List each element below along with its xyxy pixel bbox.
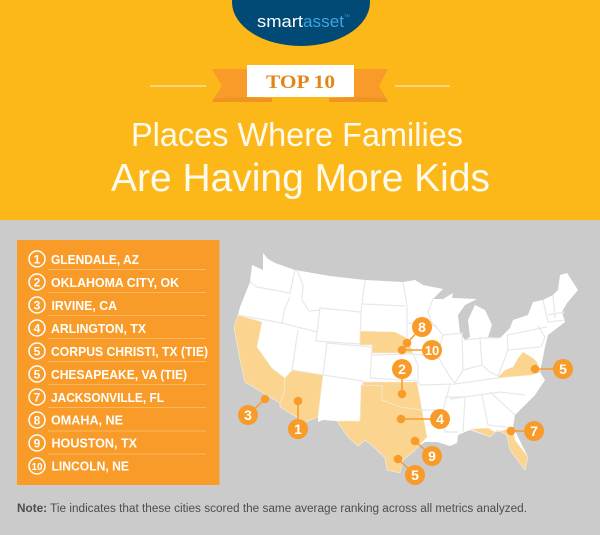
marker 2 Oklahoma City: 2: [398, 361, 406, 377]
ranking panel: GLENDALE, AZ: [51, 252, 139, 267]
marker 5 Corpus Christi: 5: [411, 467, 419, 483]
marker 1 Glendale: [288, 397, 308, 439]
ranking panel: OMAHA, NE: [51, 412, 123, 428]
US map: [234, 253, 578, 473]
marker 5 Chesapeake: [531, 359, 573, 379]
logo badge: [232, 0, 370, 46]
map markers: [238, 317, 573, 485]
marker 5 Corpus Christi: [394, 455, 425, 485]
marker 9 Houston: [411, 437, 442, 466]
footnote: Note: Tie indicates that these cities scored the same average ranking across all metrics analyzed.: [17, 503, 527, 515]
ranking panel: 1: [34, 252, 41, 266]
ranking panel: 2: [34, 276, 41, 290]
title: [111, 116, 490, 200]
marker 3 Irvine: 3: [244, 407, 252, 423]
logo badge: smart: [257, 12, 303, 31]
logo badge: asset: [303, 12, 344, 31]
ranking panel: CORPUS CHRISTI, TX (TIE): [51, 344, 208, 359]
ranking panel: 8: [34, 414, 41, 428]
title: Are Having More Kids: [111, 157, 490, 200]
marker 3 Irvine: [238, 395, 269, 425]
map: national outline: [234, 253, 578, 473]
marker 9 Houston: 9: [428, 448, 436, 464]
ranking panel: 10: [31, 462, 43, 473]
header band: [0, 0, 600, 220]
marker 4 Arlington: [397, 409, 450, 429]
map: state borders: [238, 270, 565, 432]
ranking panel: 5: [34, 344, 41, 358]
ranking panel: 3: [34, 298, 41, 312]
ranking panel: 7: [34, 390, 41, 404]
logo badge: TM: [344, 13, 350, 18]
marker 8 Omaha: 8: [418, 319, 426, 335]
marker 4 Arlington: 4: [436, 411, 444, 427]
title: Places Where Families: [131, 116, 463, 153]
ranking panel: CHESAPEAKE, VA (TIE): [51, 367, 187, 382]
ranking panel: JACKSONVILLE, FL: [51, 390, 164, 405]
top 10 ribbon: TOP 10: [266, 72, 335, 93]
marker 1 Glendale: 1: [294, 421, 302, 437]
ranking panel: 4: [34, 322, 41, 336]
ranking panel: IRVINE, CA: [52, 298, 118, 313]
marker 5 Chesapeake: 5: [559, 361, 567, 377]
ranking panel: OKLAHOMA CITY, OK: [51, 275, 180, 290]
marker 10 Lincoln: 10: [425, 343, 439, 358]
marker 10 Lincoln: [398, 340, 442, 360]
top 10 ribbon: [150, 65, 450, 102]
ranking panel: [17, 240, 220, 485]
ranking panel: 5: [34, 368, 41, 382]
marker 8 Omaha: [403, 317, 432, 347]
map: highlighted states: [234, 315, 540, 473]
ranking panel: 9: [34, 436, 41, 450]
ranking panel: ARLINGTON, TX: [51, 321, 146, 336]
marker 2 Oklahoma City: [392, 359, 412, 398]
marker 7 Jacksonville: 7: [530, 423, 538, 439]
ranking panel: LINCOLN, NE: [52, 458, 129, 474]
ranking panel: HOUSTON, TX: [52, 436, 137, 450]
marker 7 Jacksonville: [507, 421, 544, 441]
